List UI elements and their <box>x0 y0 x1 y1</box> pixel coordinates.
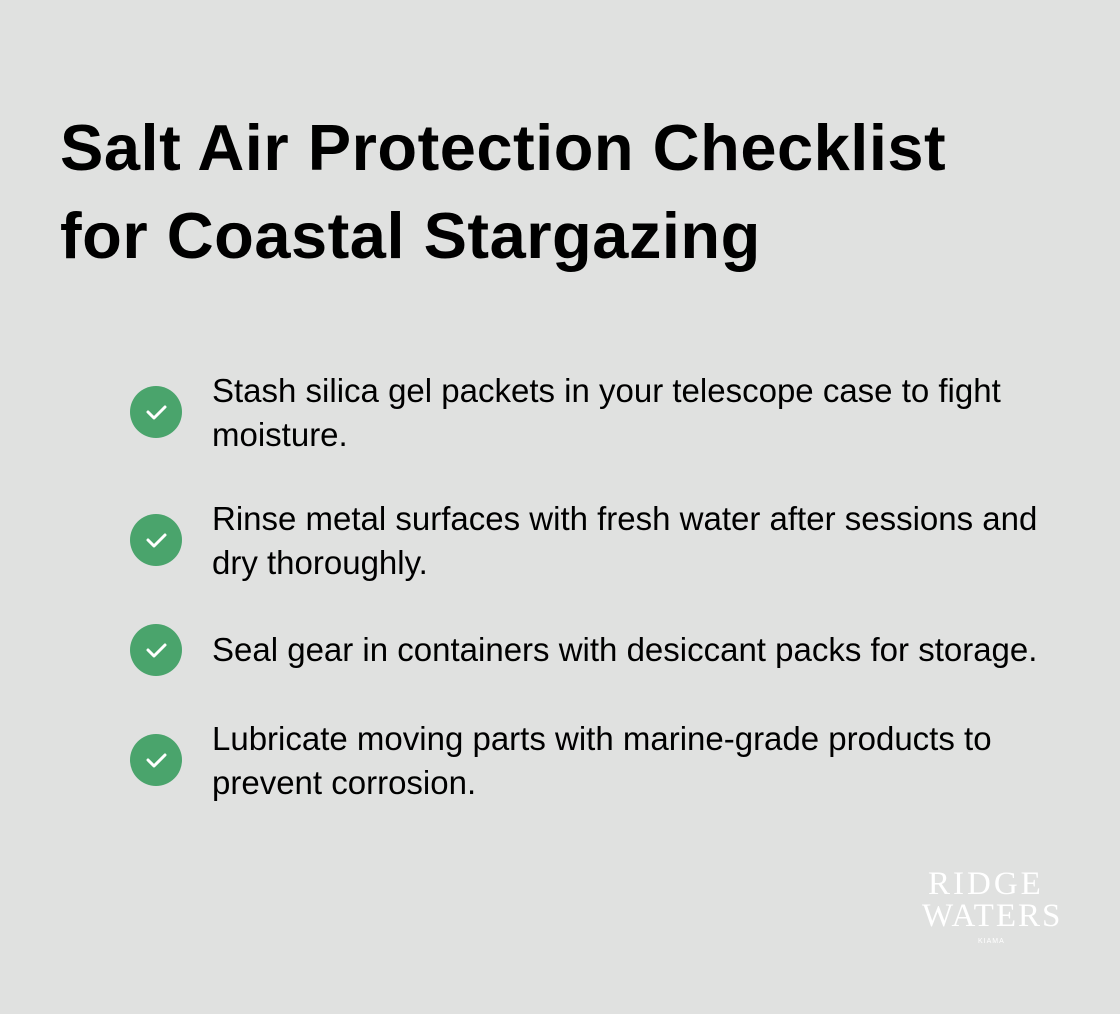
checklist item 2 <box>130 500 1037 581</box>
text: Lubricate moving parts with marine-grade products to <box>212 720 992 757</box>
title: for Coastal Stargazing <box>60 199 761 272</box>
title: Salt Air Protection Checklist <box>60 111 946 184</box>
checklist item 1 <box>130 372 1001 453</box>
text: dry thoroughly. <box>212 544 428 581</box>
text <box>212 500 1037 581</box>
logo: RIDGE <box>928 866 1044 902</box>
text <box>212 372 1001 453</box>
logo <box>922 866 1062 945</box>
text: moisture. <box>212 416 348 453</box>
icon: check <box>130 624 182 676</box>
checklist item 4 <box>130 720 992 801</box>
logo: KIAMA <box>978 938 1005 945</box>
icon: check <box>130 386 182 438</box>
logo: WATERS <box>922 898 1062 934</box>
title <box>60 111 946 272</box>
checklist item 3 <box>130 624 1037 676</box>
icon: check <box>130 514 182 566</box>
text: Stash silica gel packets in your telescope case to fight <box>212 372 1001 409</box>
text: Seal gear in containers with desiccant packs for storage. <box>212 631 1037 668</box>
text <box>212 720 992 801</box>
text: prevent corrosion. <box>212 764 476 801</box>
icon: check <box>130 734 182 786</box>
text: Rinse metal surfaces with fresh water after sessions and <box>212 500 1037 537</box>
